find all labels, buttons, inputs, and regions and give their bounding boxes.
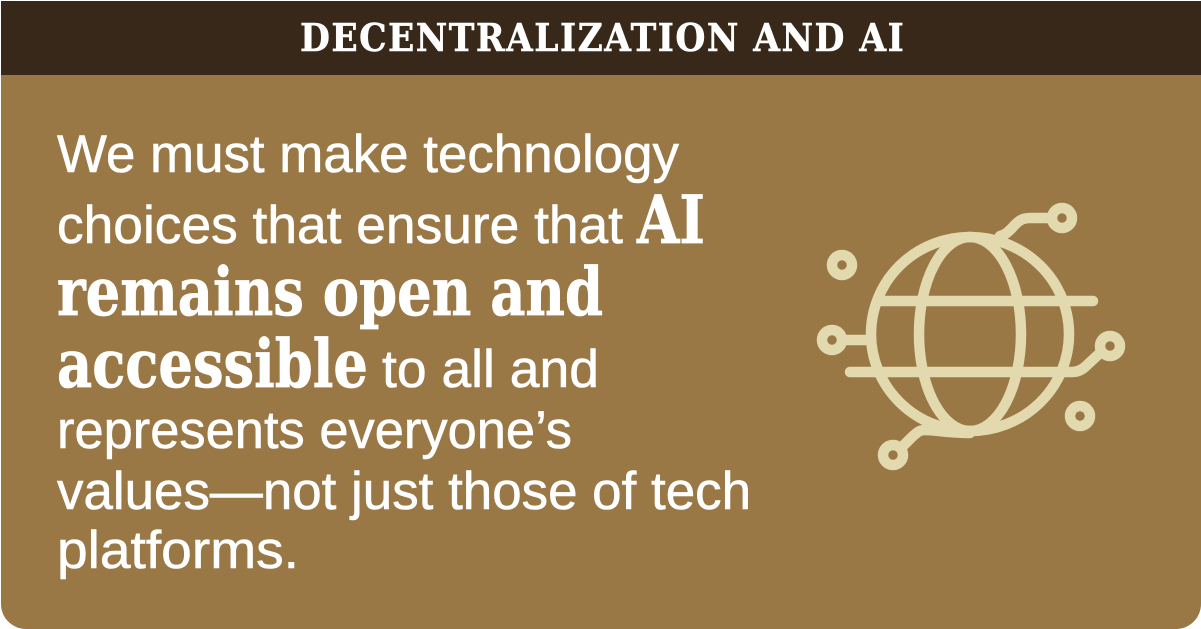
text block: main statement: choices that ensure that — [57, 196, 623, 255]
text block: main statement: We must make technology — [57, 125, 679, 184]
text block: main statement: values—not just those of tech — [57, 462, 751, 521]
text block: main statement: accessible — [57, 325, 368, 403]
text block: main statement: remains open and — [57, 253, 603, 331]
title: DECENTRALIZATION AND AI — [300, 15, 904, 60]
text block: main statement: to all and — [382, 340, 599, 399]
text block: main statement: represents everyone’s — [57, 401, 572, 460]
text block: main statement — [57, 125, 751, 580]
icon: networked globe — [822, 208, 1120, 465]
text block: main statement: platforms. — [57, 521, 299, 580]
heading bar — [1, 1, 1201, 75]
text block: main statement: AI — [636, 181, 705, 259]
